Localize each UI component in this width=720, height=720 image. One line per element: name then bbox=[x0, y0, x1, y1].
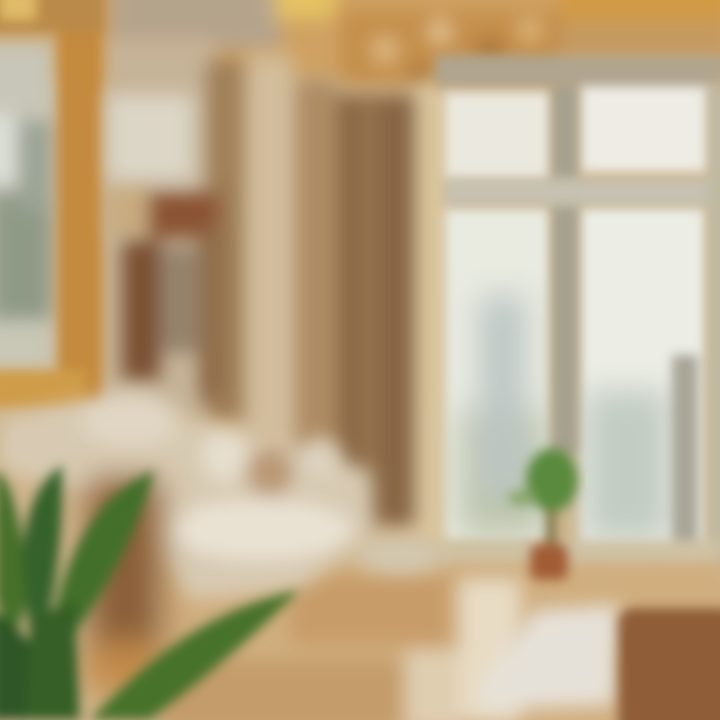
window mullions bbox=[440, 85, 720, 565]
white sofa bbox=[0, 392, 445, 600]
ceiling bbox=[0, 0, 720, 85]
foreground palm plant bbox=[0, 465, 300, 720]
wall and curtains bbox=[105, 40, 446, 545]
shelves bbox=[108, 95, 225, 400]
main window bbox=[435, 55, 720, 553]
pillow bbox=[480, 605, 620, 710]
left window bbox=[0, 40, 55, 370]
golden frame bbox=[0, 0, 105, 408]
floor bbox=[160, 565, 720, 720]
small plant and pot bbox=[508, 448, 578, 580]
brown chair bbox=[618, 608, 720, 720]
